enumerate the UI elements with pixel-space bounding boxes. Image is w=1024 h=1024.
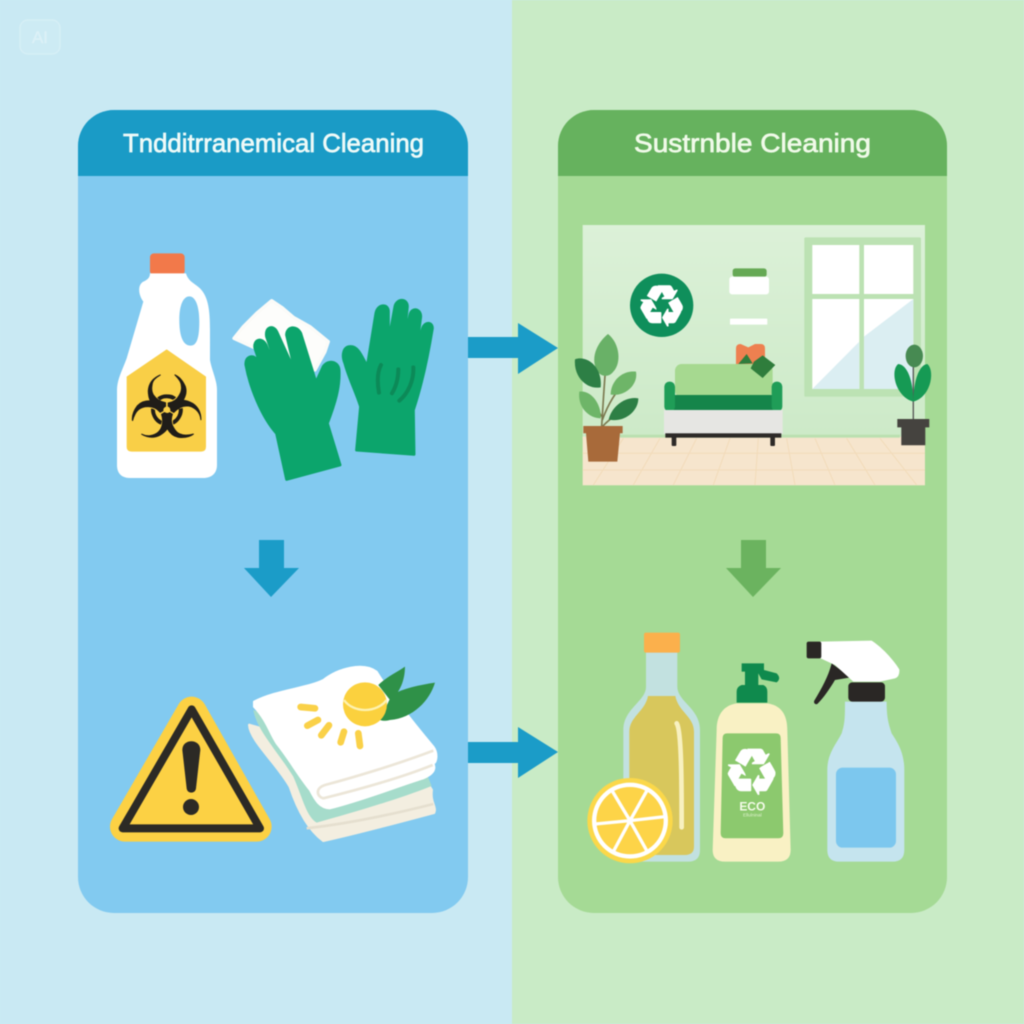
- panel header: [78, 110, 468, 176]
- AI badge: AI: [32, 28, 48, 47]
- panel body: [558, 110, 947, 913]
- floor: [583, 437, 925, 485]
- recycling badge: ♻: [637, 274, 687, 339]
- panel header: [558, 110, 947, 176]
- recycling glyph: ♻: [723, 735, 780, 809]
- bottle body: [117, 273, 217, 478]
- wall shelf items: [729, 268, 769, 325]
- icon: bleach bottle with biohazard label: [117, 253, 217, 478]
- liquid: [836, 768, 896, 848]
- arrow: bottom, left to right: [468, 727, 558, 778]
- bottle cap: [644, 633, 680, 653]
- arrow: down, right panel: [726, 540, 781, 597]
- background: left half: [0, 0, 512, 1024]
- bottle cap: [150, 253, 185, 275]
- eco label: [721, 733, 783, 838]
- window: [804, 237, 921, 397]
- illustration: eco living room: [575, 225, 931, 485]
- panel body: [78, 110, 468, 913]
- panel: sustainable cleaning: [558, 110, 947, 913]
- arrow: down, left panel: [244, 540, 299, 597]
- eco small text: Ellulninal: [743, 813, 762, 818]
- lemon: [343, 682, 387, 726]
- nozzle: [807, 642, 821, 658]
- lower towel stripe: [307, 804, 433, 828]
- hazard label: [127, 349, 206, 452]
- glove creases: [378, 365, 413, 401]
- glass bottle: [623, 652, 700, 862]
- panel: traditional chemical cleaning: [78, 110, 468, 913]
- soap body: [713, 703, 791, 862]
- floor tiles: [583, 438, 925, 485]
- background: right half: [512, 0, 1024, 1024]
- bottle highlight: [677, 723, 682, 827]
- arrow: top, left to right: [468, 323, 558, 374]
- icon: warning triangle: [123, 709, 260, 828]
- sofa: [664, 344, 783, 446]
- icon: eco soap pump bottle: [713, 663, 791, 862]
- heading: sustainable: Sustrnble Cleaning: [634, 128, 871, 158]
- trigger: [814, 663, 851, 704]
- leaves: [378, 667, 435, 721]
- sun rays: [301, 707, 360, 746]
- AI badge: [20, 20, 60, 54]
- plant right: [894, 345, 931, 445]
- spray head: [821, 641, 899, 682]
- plant left: [575, 334, 638, 462]
- lower towel: [249, 725, 435, 841]
- icon: oil bottle with lemon slice: [587, 633, 700, 863]
- spray body: [827, 702, 904, 862]
- icon: folded towels with lemon: [249, 667, 436, 841]
- left glove: [246, 328, 340, 479]
- collar: [848, 682, 885, 702]
- biohazard glyph: ☣: [128, 358, 205, 458]
- icon: spray bottle: [807, 641, 904, 862]
- skirting: [620, 435, 900, 438]
- oil: [629, 696, 694, 855]
- right glove: [343, 300, 432, 454]
- heading: traditional: Tndditrranemical Cleaning: [123, 128, 424, 158]
- towel fold line: [318, 751, 433, 798]
- wall: [583, 225, 925, 438]
- pump: [737, 663, 779, 703]
- lemon slice: [587, 778, 673, 863]
- top towel: [254, 667, 436, 808]
- middle towel: [253, 710, 432, 823]
- eco text: ECO: [739, 799, 765, 813]
- cloth: [234, 301, 328, 370]
- icon: cloth and green gloves: [234, 300, 432, 479]
